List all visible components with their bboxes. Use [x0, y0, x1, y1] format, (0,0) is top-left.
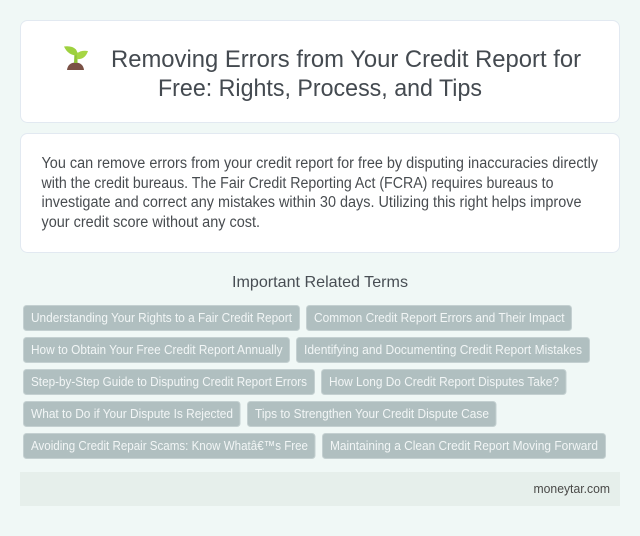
tag: Avoiding Credit Repair Scams: Know Whatâ€™s Free: [31, 438, 308, 453]
summary text: your credit score without any cost.: [42, 214, 260, 231]
tag: How Long Do Credit Report Disputes Take?: [329, 374, 559, 389]
tag: [322, 370, 566, 394]
title text: Removing Errors from Your Credit Report for: [111, 46, 581, 73]
tag: Identifying and Documenting Credit Report Mistakes: [304, 342, 582, 357]
tag: Understanding Your Rights to a Fair Credit Report: [31, 310, 292, 325]
tag: How to Obtain Your Free Credit Report Annually: [31, 342, 283, 357]
tag: What to Do if Your Dispute Is Rejected: [31, 406, 233, 421]
tag: [24, 370, 314, 394]
tag: [296, 338, 590, 362]
footer source text: moneytar.com: [534, 482, 610, 496]
tag: [306, 306, 572, 330]
tag: [24, 434, 315, 458]
footer: [20, 472, 620, 506]
tag: Tips to Strengthen Your Credit Dispute Case: [255, 406, 489, 421]
panel: summary paragraph: [20, 134, 620, 252]
tag: Maintaining a Clean Credit Report Moving Forward: [330, 438, 598, 453]
title text: [111, 46, 581, 102]
tag: [248, 402, 496, 426]
summary text: You can remove errors from your credit report for free by disputing inaccuracies directly: [42, 155, 598, 172]
heading: important related terms: Important Related Terms: [232, 274, 408, 291]
panel: related term tags: [24, 306, 606, 458]
summary text: [41, 155, 598, 231]
tag: [24, 338, 290, 362]
summary text: with the credit bureaus. The Fair Credit Reporting Act (FCRA) requires bureaus to: [41, 175, 554, 192]
tag: [24, 306, 300, 330]
icon: seedling: [64, 46, 88, 70]
tag: [24, 402, 240, 426]
tag: [322, 434, 606, 458]
tag: Step-by-Step Guide to Disputing Credit Report Errors: [31, 374, 307, 389]
summary text: investigate and correct any mistakes within 30 days. Utilizing this right helps improve: [42, 194, 582, 211]
title text: Free: Rights, Process, and Tips: [158, 75, 482, 102]
tag: Common Credit Report Errors and Their Impact: [314, 310, 565, 325]
panel: title header: [20, 20, 620, 122]
